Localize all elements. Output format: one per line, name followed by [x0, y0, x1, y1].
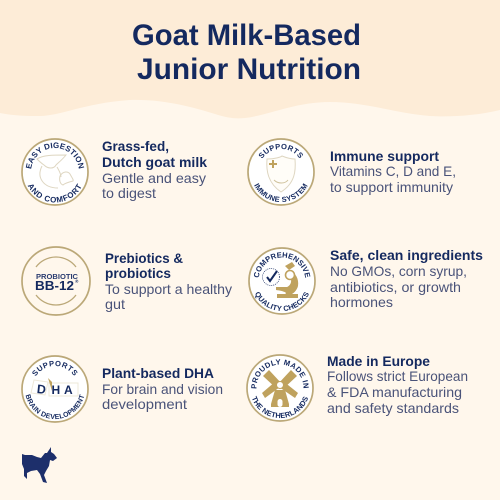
badge: supports immune system	[247, 138, 315, 206]
icon: goat silhouette	[22, 447, 57, 483]
title: Junior Nutrition	[137, 53, 361, 86]
icon: DHA tiles: H	[52, 383, 60, 397]
text: safe ingredients: No GMOs, corn syrup,	[330, 263, 467, 279]
text: immune support: Immune support	[330, 148, 439, 164]
text: grass-fed: Gentle and easy	[102, 170, 206, 186]
badge label: PROBIOTIC	[36, 274, 78, 281]
text: safe ingredients	[330, 247, 483, 310]
badge: probiotic BB-12: ®	[75, 278, 79, 284]
text: grass-fed	[102, 138, 207, 201]
curved text top: COMPREHENSIVE	[254, 252, 310, 278]
icon: DHA tiles: A	[64, 383, 73, 397]
text: grass-fed: Grass-fed,	[102, 138, 169, 154]
text: grass-fed: to digest	[102, 185, 156, 201]
text: prebiotics: probiotics	[105, 265, 171, 281]
icon: shield	[267, 156, 295, 192]
text: prebiotics: Prebiotics &	[105, 250, 183, 266]
text: made in europe	[327, 353, 468, 416]
badge: probiotic BB-12: BB-12	[35, 278, 74, 293]
text: immune support: Vitamins C, D and E,	[330, 163, 456, 179]
text: plant-based DHA: development	[102, 396, 187, 412]
title	[132, 19, 361, 86]
text: made in europe: & FDA manufacturing	[327, 384, 462, 400]
badge: easy digestion and comfort	[21, 138, 89, 206]
curved text top: EASY DIGESTION	[26, 142, 84, 169]
text: plant-based DHA: Plant-based DHA	[102, 365, 214, 381]
text: prebiotics: To support a healthy	[105, 281, 232, 297]
wavy header band	[0, 0, 500, 118]
text: plant-based DHA: For brain and vision	[102, 381, 223, 397]
icon: goat and kid	[37, 155, 73, 188]
badge: proudly made in the netherlands	[246, 354, 314, 422]
icon: windmill	[262, 370, 298, 407]
badge: supports brain development	[21, 355, 89, 423]
icon: DHA tiles: D	[36, 382, 47, 397]
curved text bottom: QUALITY CHECKS	[255, 292, 309, 311]
text: safe ingredients: Safe, clean ingredients	[330, 247, 483, 263]
text: plant-based DHA	[102, 365, 223, 412]
text: made in europe: Made in Europe	[327, 353, 430, 369]
text: made in europe: and safety standards	[327, 400, 459, 416]
curved text bottom: IMMUNE SYSTEM	[254, 183, 308, 202]
curved text bottom: BRAIN DEVELOPMENT	[26, 394, 84, 420]
title: Goat Milk-Based	[132, 19, 361, 52]
curved text bottom: THE NETHERLANDS	[252, 396, 308, 418]
text: prebiotics: gut	[105, 296, 125, 312]
text: made in europe: Follows strict European	[327, 368, 468, 384]
text: immune support	[330, 148, 456, 195]
badge: comprehensive quality checks	[248, 247, 316, 315]
text: immune support: to support immunity	[330, 179, 453, 195]
text: prebiotics	[105, 250, 232, 312]
text: safe ingredients: antibiotics, or growth	[330, 279, 461, 295]
icon: check mark seal	[262, 268, 280, 286]
icon: DHA tiles	[31, 378, 78, 397]
curved text top: PROUDLY MADE IN	[251, 359, 309, 388]
badge: probiotic BB-12	[22, 247, 90, 315]
text: safe ingredients: hormones	[330, 294, 393, 310]
icon: microscope	[276, 262, 298, 298]
text: grass-fed: Dutch goat milk	[102, 154, 207, 170]
curved text top: SUPPORTS	[258, 144, 303, 158]
curved text top: SUPPORTS	[32, 360, 78, 376]
curved text bottom: AND COMFORT	[28, 183, 81, 202]
